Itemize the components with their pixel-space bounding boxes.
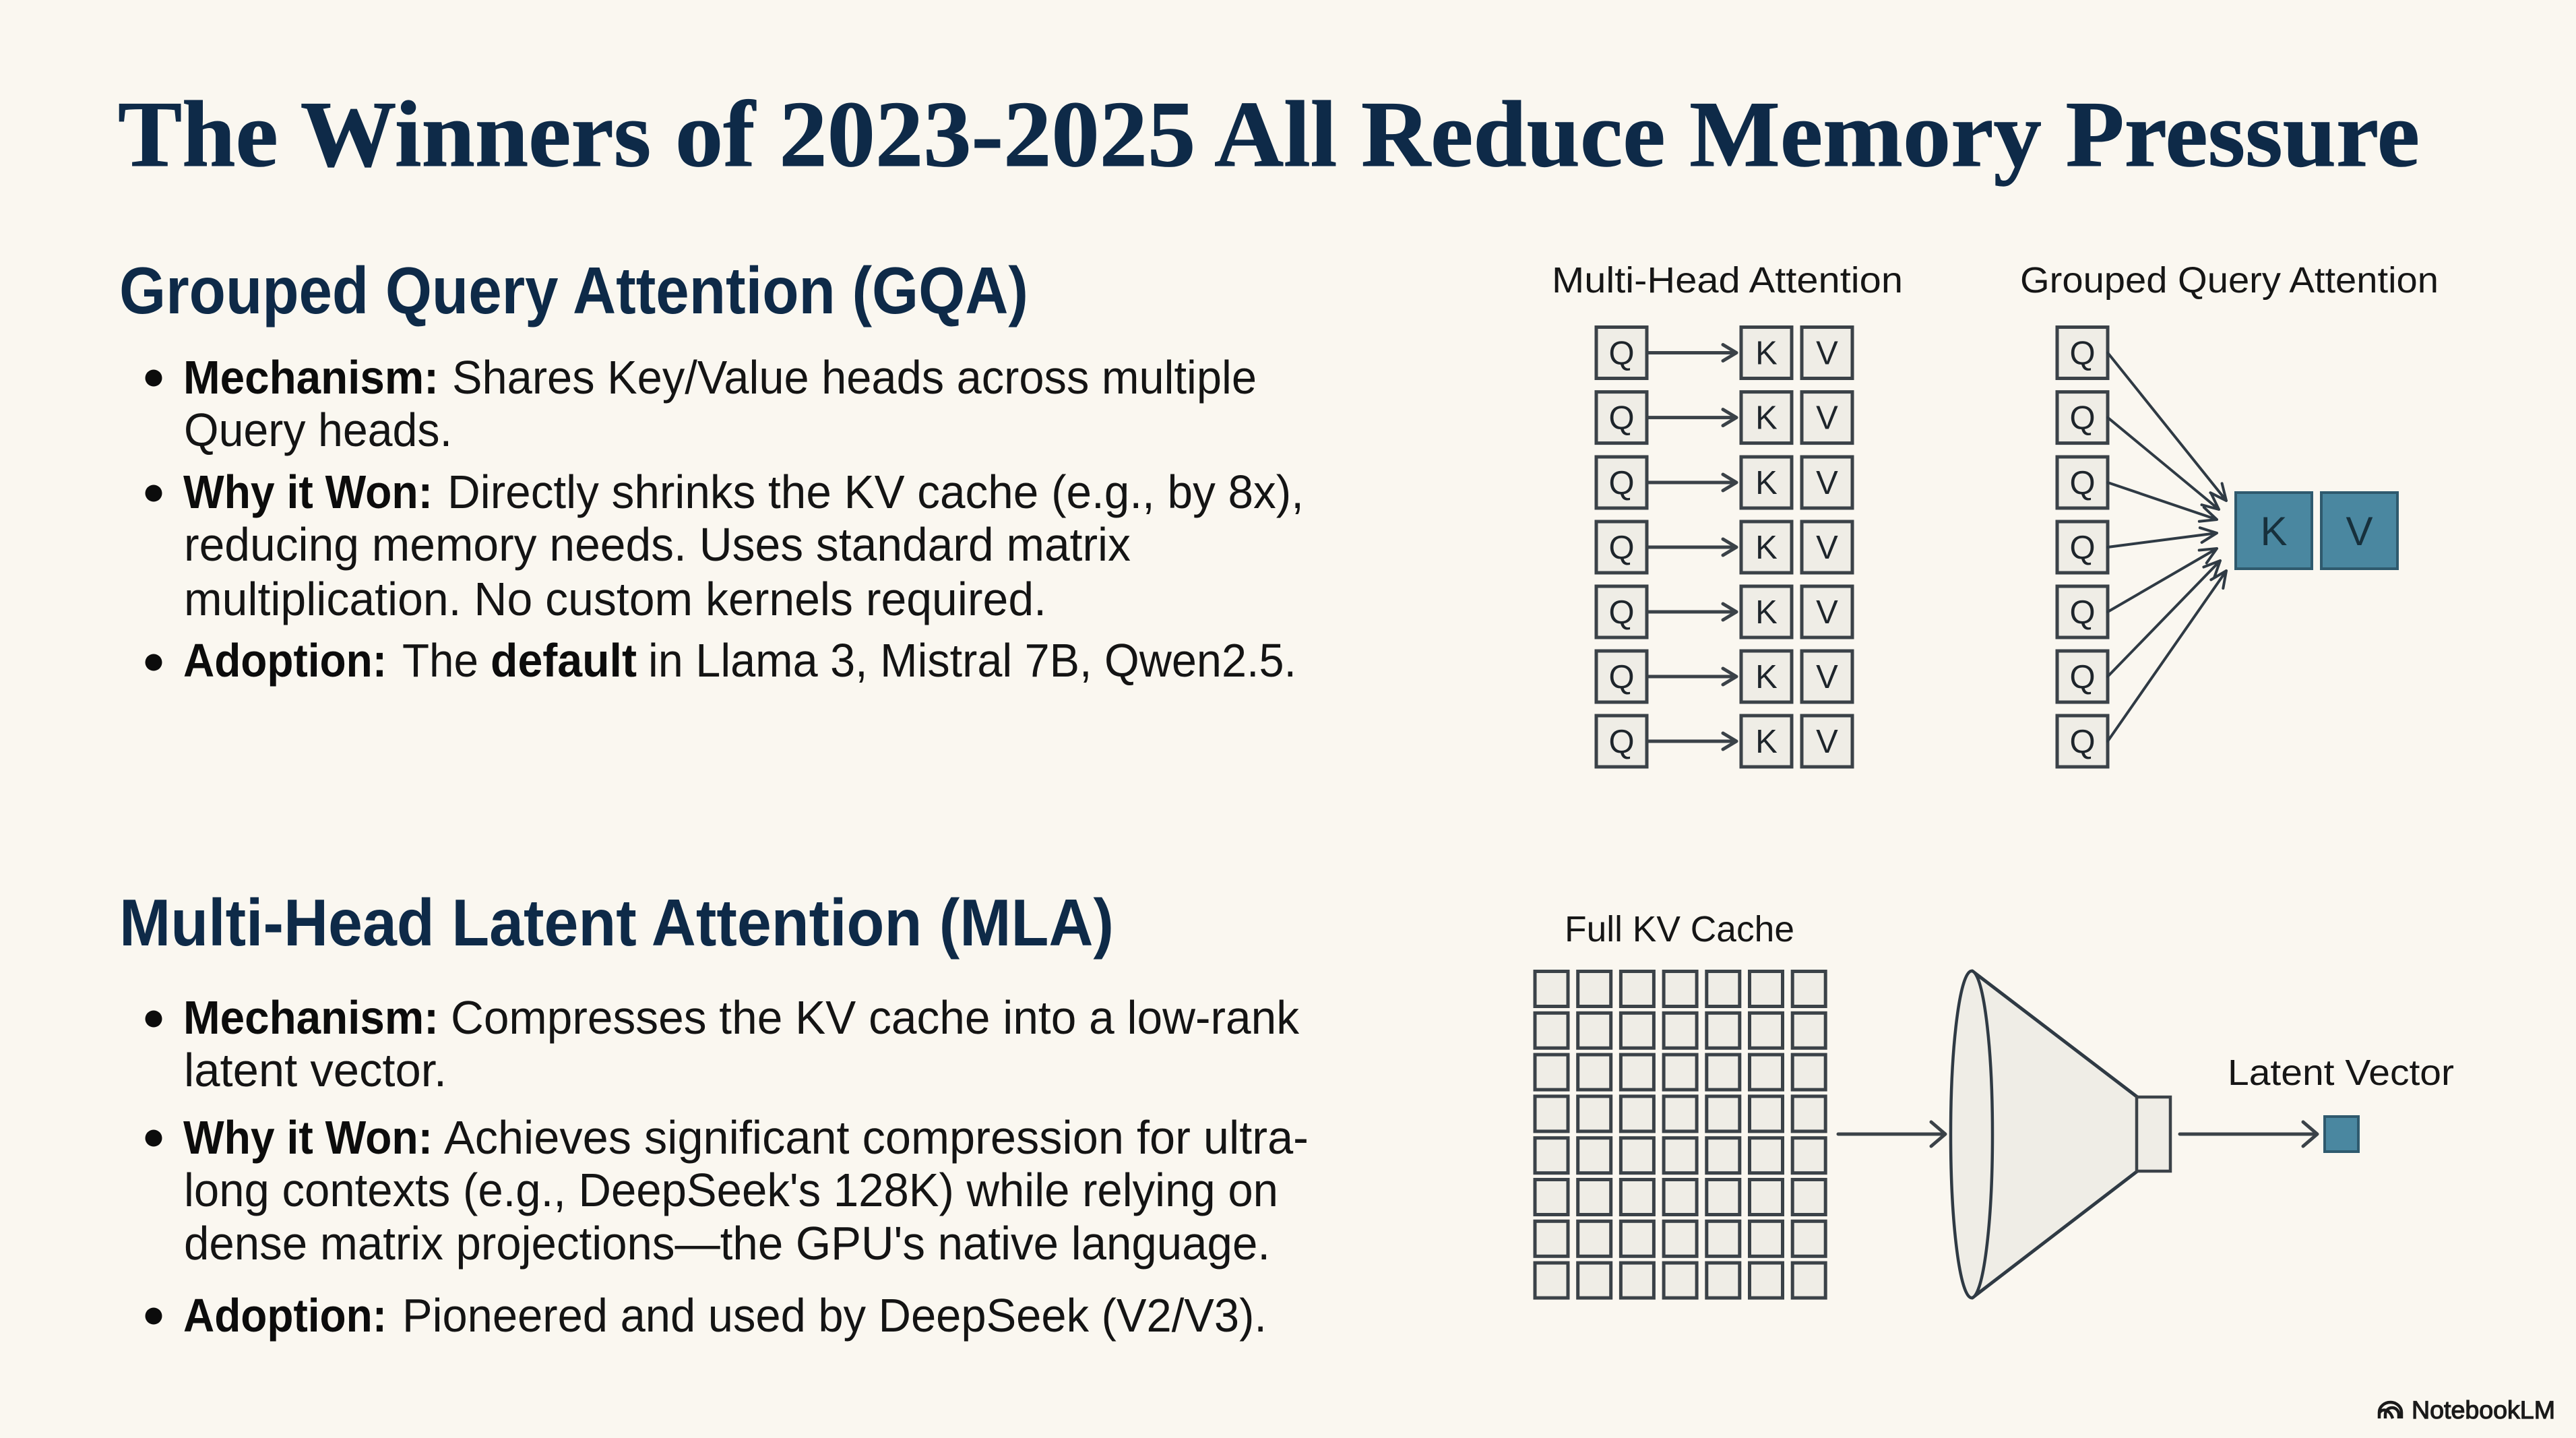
heading: MLA: Multi-Head Latent Attention (MLA) (119, 885, 1114, 960)
shared K block: K (2260, 509, 2288, 554)
bullet: adoption: in Llama 3, Mistral 7B, Qwen2.5. (648, 634, 1296, 687)
row 5 (1596, 586, 1852, 637)
query boxes: Q (2069, 594, 2096, 631)
row 6: K (1755, 659, 1778, 695)
bullet: mechanism (146, 351, 1257, 456)
row 6: V (1816, 659, 1838, 695)
arrow: compressor to latent vector (2180, 1122, 2317, 1146)
bullet: why it won: reducing memory needs. Uses standard matrix (184, 518, 1131, 571)
row 7: V (1816, 724, 1838, 760)
query boxes: Q (2069, 659, 2096, 695)
row 7 (1596, 716, 1852, 767)
row 7: K (1755, 724, 1778, 760)
bullet: adoption: Adoption: (183, 1289, 387, 1342)
label: multi-head attention: Multi-Head Attention (1552, 260, 1903, 301)
row 3: K (1755, 465, 1778, 501)
row 5: K (1755, 594, 1778, 631)
row 2 (1596, 392, 1852, 443)
bullet: mechanism: latent vector. (184, 1044, 447, 1096)
bullet: why it won: dense matrix projections—the GPU's native language. (184, 1217, 1270, 1270)
shared V block: V (2346, 509, 2373, 554)
bullet: mechanism (146, 991, 1300, 1096)
bullet: why it won: long contexts (e.g., DeepSeek's 128K) while relying on (184, 1164, 1278, 1216)
row 2: Q (1608, 400, 1635, 437)
latent vector square (2325, 1117, 2358, 1152)
row 4: V (1816, 530, 1838, 566)
query boxes (2057, 327, 2108, 767)
bullet: why it won (146, 1111, 1309, 1270)
panel: MLA text (119, 885, 1309, 1342)
row 1: K (1755, 336, 1778, 372)
bullet: mechanism: Shares Key/Value heads across multiple (452, 351, 1257, 404)
row 6: Q (1608, 659, 1635, 695)
query boxes: Q (2069, 465, 2096, 501)
row 5: Q (1608, 594, 1635, 631)
icon: NotebookLM logo (2379, 1402, 2401, 1418)
row 6 (1596, 651, 1852, 702)
bullet: mechanism: Compresses the KV cache into a low-rank (451, 991, 1300, 1044)
row 1: V (1816, 336, 1838, 372)
bullet: adoption: Adoption: (183, 634, 387, 687)
row 4: Q (1608, 530, 1635, 566)
diagram: grouped query attention (2020, 260, 2439, 767)
row 7: Q (1608, 724, 1635, 760)
bullet: mechanism: Mechanism: (183, 991, 439, 1044)
query boxes: Q (2069, 336, 2096, 372)
label: grouped query attention: Grouped Query Attention (2020, 260, 2439, 301)
diagram: MLA compression (1535, 909, 2454, 1298)
row 3 (1596, 457, 1852, 508)
row 2: V (1816, 400, 1838, 437)
bullet: why it won: Why it Won: (183, 466, 433, 518)
shared V block (2321, 493, 2397, 569)
label: full KV cache: Full KV Cache (1565, 909, 1794, 949)
title: The Winners of 2023-2025 All Reduce Memory Pressure (118, 82, 2420, 187)
compressor funnel (1951, 971, 2170, 1298)
row 4 (1596, 522, 1852, 573)
bullet: why it won (146, 466, 1304, 625)
heading: GQA: Grouped Query Attention (GQA) (119, 253, 1028, 327)
row 1: Q (1608, 336, 1635, 372)
query boxes: Q (2069, 724, 2096, 760)
watermark: NotebookLM: NotebookLM (2412, 1396, 2555, 1424)
bullet: why it won: Directly shrinks the KV cache (e.g., by 8x), (447, 466, 1304, 518)
label: latent vector: Latent Vector (2228, 1053, 2454, 1093)
query boxes: Q (2069, 530, 2096, 566)
bullet: adoption (146, 634, 1296, 687)
bullet: why it won: Achieves significant compression for ultra- (444, 1111, 1309, 1164)
bullet: adoption: Pioneered and used by DeepSeek (V2/V3). (402, 1289, 1267, 1342)
row 3: V (1816, 465, 1838, 501)
KV cache grid (1535, 972, 1825, 1298)
bullet: mechanism: Query heads. (184, 404, 452, 456)
bullet: mechanism: Mechanism: (183, 351, 439, 404)
shared K block (2236, 493, 2312, 569)
diagram: multi-head attention (1552, 260, 1903, 767)
arrow: cache to compressor (1838, 1122, 1945, 1146)
row 3: Q (1608, 465, 1635, 501)
converging arrows (2108, 353, 2226, 741)
panel: GQA text (119, 253, 1304, 687)
row 5: V (1816, 594, 1838, 631)
row 1 (1596, 327, 1852, 379)
bullet: why it won: Why it Won: (183, 1111, 433, 1164)
query boxes: Q (2069, 400, 2096, 437)
bullet: adoption: default (491, 634, 637, 687)
row 2: K (1755, 400, 1778, 437)
bullet: adoption: The (402, 634, 478, 687)
bullet: why it won: multiplication. No custom kernels required. (184, 573, 1046, 625)
row 4: K (1755, 530, 1778, 566)
